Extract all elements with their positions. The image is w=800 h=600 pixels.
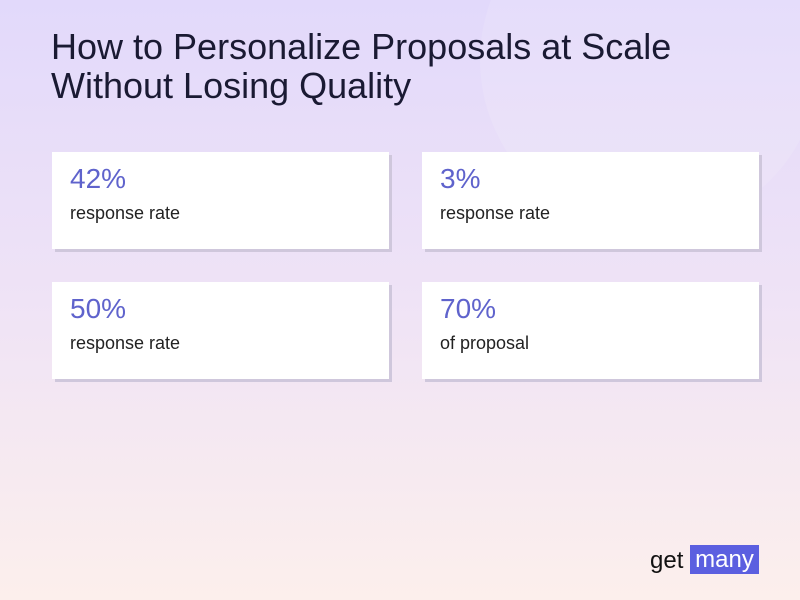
card: 3% <box>422 152 759 249</box>
logo <box>650 545 759 574</box>
card: 42%: response rate <box>70 203 180 223</box>
card: 50%: 50% <box>70 293 126 324</box>
title <box>51 26 671 106</box>
card: 3%: response rate <box>440 203 550 223</box>
card: 3%: 3% <box>440 163 480 194</box>
card: 50%: response rate <box>70 333 180 353</box>
card: 70% <box>422 282 759 379</box>
logo: get <box>650 547 683 574</box>
title: How to Personalize Proposals at Scale <box>51 26 671 67</box>
card: 50% <box>52 282 389 379</box>
card: 42% <box>52 152 389 249</box>
title: Without Losing Quality <box>51 65 411 106</box>
card: 70%: of proposal <box>440 333 529 353</box>
logo: many <box>695 546 754 573</box>
card: 70%: 70% <box>440 293 496 324</box>
card: 42%: 42% <box>70 163 126 194</box>
